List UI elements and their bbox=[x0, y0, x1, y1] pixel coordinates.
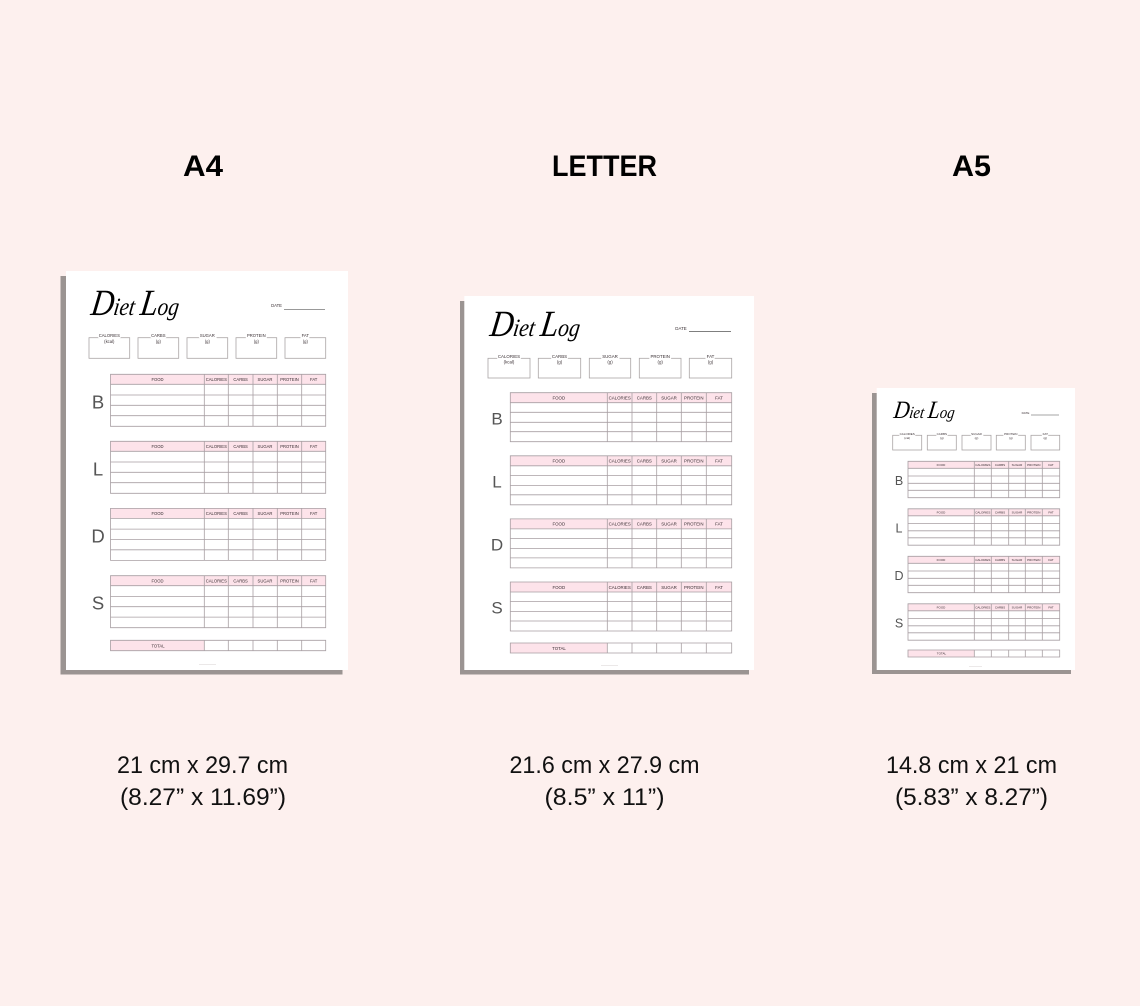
summary box: calories bbox=[488, 354, 530, 378]
date field: DATE bbox=[1022, 411, 1029, 415]
table: snacks: CALORIES bbox=[609, 585, 631, 590]
meal letter B: B bbox=[491, 410, 503, 428]
total row bbox=[110, 640, 326, 651]
table: lunch: FOOD bbox=[937, 510, 946, 514]
table: breakfast: SUGAR bbox=[258, 377, 272, 382]
table: breakfast bbox=[908, 461, 1060, 498]
summary box: calories: (cal) bbox=[904, 436, 910, 440]
dimensions: Letter bbox=[510, 752, 700, 811]
table: snacks: CARBS bbox=[637, 585, 652, 590]
title: Diet Log bbox=[88, 283, 182, 324]
table: dinner bbox=[110, 508, 326, 560]
summary box: carbs: (g) bbox=[940, 436, 944, 440]
table: dinner: PROTEIN bbox=[280, 511, 299, 516]
summary box: fat: FAT bbox=[1043, 432, 1048, 436]
table: snacks: FOOD bbox=[937, 605, 946, 609]
table: snacks: SUGAR bbox=[1012, 605, 1023, 609]
summary box: sugar: (g) bbox=[607, 360, 613, 364]
summary box: protein: (g) bbox=[1009, 436, 1013, 440]
table: snacks: PROTEIN bbox=[280, 579, 299, 584]
table: breakfast: CARBS bbox=[995, 463, 1005, 467]
summary box: carbs: (g) bbox=[156, 339, 161, 344]
heading: A4: A4 bbox=[183, 150, 223, 183]
table: dinner bbox=[510, 519, 732, 568]
table: lunch: SUGAR bbox=[258, 444, 272, 449]
dimensions: Letter: 21.6 cm x 27.9 cm bbox=[510, 752, 700, 779]
table: snacks bbox=[110, 576, 326, 628]
table: dinner: PROTEIN bbox=[684, 522, 704, 527]
page shadow bbox=[872, 393, 1071, 674]
table: snacks: CALORIES bbox=[206, 579, 227, 584]
date field: DATE bbox=[271, 303, 282, 308]
summary box: protein: PROTEIN bbox=[650, 354, 670, 359]
table: lunch: FAT bbox=[310, 444, 318, 449]
table: dinner: FAT bbox=[1048, 558, 1054, 562]
heading: A5: A5 bbox=[952, 150, 991, 183]
panel: A5 page bbox=[872, 388, 1075, 674]
table: breakfast: FOOD bbox=[552, 396, 565, 401]
table: dinner: PROTEIN bbox=[1027, 558, 1040, 562]
summary box: protein bbox=[996, 432, 1025, 450]
summary box: sugar: (g) bbox=[975, 436, 978, 440]
summary box: sugar: SUGAR bbox=[602, 354, 618, 359]
table: snacks: CARBS bbox=[233, 579, 248, 584]
page sheet bbox=[464, 296, 754, 670]
summary box: sugar bbox=[589, 354, 631, 378]
table: lunch: FOOD bbox=[552, 459, 565, 464]
table: breakfast bbox=[110, 374, 326, 426]
table: snacks: PROTEIN bbox=[1027, 605, 1040, 609]
summary box: carbs: (g) bbox=[557, 360, 563, 364]
meal letter S: S bbox=[491, 598, 503, 618]
summary box: sugar bbox=[187, 333, 228, 358]
table: breakfast: CARBS bbox=[233, 377, 248, 382]
table: dinner: SUGAR bbox=[661, 522, 677, 527]
table: breakfast: FOOD bbox=[937, 463, 946, 467]
page shadow bbox=[60, 276, 342, 674]
summary box: carbs: CARBS bbox=[937, 432, 947, 436]
page sheet bbox=[877, 388, 1075, 670]
title: Diet Log bbox=[487, 304, 583, 345]
summary box: protein: PROTEIN bbox=[247, 333, 266, 338]
dimensions: A5: (5.83” x 8.27”) bbox=[895, 784, 1048, 811]
table: lunch: CARBS bbox=[995, 510, 1005, 514]
table: lunch: CALORIES bbox=[975, 510, 990, 514]
table: snacks: CARBS bbox=[995, 605, 1005, 609]
dimensions: A5 bbox=[886, 752, 1057, 811]
summary box: protein bbox=[639, 354, 681, 378]
table: breakfast: FAT bbox=[1048, 463, 1054, 467]
summary box: sugar: SUGAR bbox=[971, 432, 983, 436]
table: dinner: FAT bbox=[715, 522, 723, 527]
table: breakfast: FAT bbox=[310, 377, 318, 382]
table: snacks bbox=[908, 604, 1060, 640]
meal letter L: L bbox=[492, 472, 502, 492]
summary box: protein: (g) bbox=[254, 339, 259, 344]
table: lunch: FAT bbox=[1048, 510, 1054, 514]
table: lunch: FAT bbox=[715, 459, 723, 464]
dimensions: A4: 21 cm x 29.7 cm bbox=[117, 752, 288, 779]
panel: A4 page bbox=[60, 271, 348, 674]
total row: TOTAL bbox=[937, 652, 947, 656]
meal letter D: D bbox=[894, 569, 904, 583]
summary box: protein bbox=[236, 333, 277, 358]
summary box: protein: PROTEIN bbox=[1004, 432, 1017, 436]
summary box: carbs bbox=[538, 354, 581, 378]
summary box: fat bbox=[285, 333, 326, 358]
table: breakfast: PROTEIN bbox=[1027, 463, 1040, 467]
summary box: fat bbox=[1031, 432, 1060, 450]
date field: DATE bbox=[675, 326, 687, 331]
table: snacks: FOOD bbox=[151, 579, 164, 584]
dimensions: Letter: (8.5” x 11”) bbox=[544, 784, 664, 811]
table: lunch: PROTEIN bbox=[684, 459, 704, 464]
table: lunch: PROTEIN bbox=[1027, 510, 1040, 514]
summary box: fat: (g) bbox=[303, 339, 308, 344]
summary box: sugar: (g) bbox=[205, 339, 210, 344]
table: lunch: PROTEIN bbox=[280, 444, 299, 449]
summary box: calories: CALORIES bbox=[498, 354, 520, 359]
dimensions: A5: 14.8 cm x 21 cm bbox=[886, 752, 1057, 779]
summary box: fat: (g) bbox=[708, 360, 714, 364]
summary box: calories bbox=[893, 432, 922, 450]
table: lunch: FOOD bbox=[151, 444, 164, 449]
meal letter B: B bbox=[92, 392, 104, 412]
table: dinner: CALORIES bbox=[609, 522, 631, 527]
meal letter D: D bbox=[91, 526, 105, 546]
title: Diet Log bbox=[891, 397, 957, 424]
table: dinner: FOOD bbox=[552, 522, 565, 527]
heading: LETTER: LETTER bbox=[552, 150, 657, 183]
table: dinner: FAT bbox=[310, 511, 318, 516]
date field bbox=[675, 326, 731, 332]
table: lunch: CALORIES bbox=[206, 444, 227, 449]
table: dinner: CALORIES bbox=[975, 558, 990, 562]
table: lunch: CALORIES bbox=[609, 459, 631, 464]
total row: TOTAL bbox=[151, 643, 165, 648]
summary box: calories: CALORIES bbox=[900, 432, 915, 436]
table: lunch: SUGAR bbox=[1012, 510, 1023, 514]
table: breakfast: CALORIES bbox=[206, 377, 227, 382]
date field bbox=[1022, 411, 1059, 415]
meal letter D: D bbox=[491, 536, 503, 554]
table: breakfast: CALORIES bbox=[975, 463, 990, 467]
table: breakfast: PROTEIN bbox=[684, 396, 704, 401]
summary box: calories: (kcal) bbox=[104, 339, 115, 344]
table: snacks: SUGAR bbox=[661, 585, 677, 590]
table: snacks: FAT bbox=[310, 579, 318, 584]
table: dinner: SUGAR bbox=[258, 511, 272, 516]
dimensions: A4 bbox=[117, 752, 288, 811]
dimensions: A4: (8.27” x 11.69”) bbox=[120, 784, 286, 811]
table: lunch: SUGAR bbox=[661, 459, 677, 464]
table: breakfast: PROTEIN bbox=[280, 377, 299, 382]
table: dinner bbox=[908, 556, 1060, 593]
table: breakfast: SUGAR bbox=[1012, 463, 1023, 467]
table: dinner: CARBS bbox=[637, 522, 652, 527]
summary box: calories bbox=[89, 333, 130, 358]
summary box: sugar: SUGAR bbox=[200, 333, 215, 338]
table: lunch bbox=[908, 509, 1060, 545]
summary box: fat: FAT bbox=[707, 354, 715, 359]
table: dinner: FOOD bbox=[937, 558, 946, 562]
summary box: calories: CALORIES bbox=[99, 333, 120, 338]
total row bbox=[908, 650, 1060, 657]
table: snacks: SUGAR bbox=[258, 579, 272, 584]
summary box: carbs bbox=[927, 432, 956, 450]
table: breakfast: FAT bbox=[715, 396, 723, 401]
table: snacks bbox=[510, 582, 732, 631]
table: snacks: FAT bbox=[715, 585, 723, 590]
meal letter S: S bbox=[895, 616, 903, 630]
table: dinner: CARBS bbox=[995, 558, 1005, 562]
meal letter L: L bbox=[93, 458, 103, 480]
total row bbox=[510, 643, 732, 653]
summary box: fat: (g) bbox=[1043, 436, 1047, 440]
table: lunch: CARBS bbox=[637, 459, 652, 464]
summary box: fat: FAT bbox=[302, 333, 309, 338]
meal letter S: S bbox=[92, 592, 104, 614]
summary box: carbs: CARBS bbox=[151, 333, 166, 338]
page shadow bbox=[460, 301, 749, 674]
table: lunch: CARBS bbox=[233, 444, 248, 449]
table: lunch bbox=[110, 441, 326, 493]
table: dinner: CARBS bbox=[233, 511, 248, 516]
date field bbox=[271, 303, 325, 310]
summary box: carbs: CARBS bbox=[552, 354, 567, 359]
summary box: carbs bbox=[138, 333, 179, 358]
summary box: sugar bbox=[962, 432, 991, 450]
panel: Letter page bbox=[460, 296, 754, 674]
total row: TOTAL bbox=[552, 646, 566, 651]
table: lunch bbox=[510, 456, 732, 505]
table: snacks: FAT bbox=[1048, 605, 1054, 609]
table: breakfast: CALORIES bbox=[609, 396, 631, 401]
meal letter B: B bbox=[895, 474, 903, 488]
table: snacks: CALORIES bbox=[975, 605, 990, 609]
page sheet bbox=[66, 271, 348, 670]
table: breakfast: FOOD bbox=[151, 377, 164, 382]
summary box: fat bbox=[689, 354, 732, 378]
summary box: protein: (g) bbox=[658, 360, 663, 364]
summary box: calories: (kcal) bbox=[504, 360, 515, 364]
table: breakfast: SUGAR bbox=[661, 396, 677, 401]
table: breakfast bbox=[510, 393, 732, 442]
table: snacks: FOOD bbox=[552, 585, 565, 590]
table: dinner: SUGAR bbox=[1012, 558, 1023, 562]
table: breakfast: CARBS bbox=[637, 396, 652, 401]
meal letter L: L bbox=[896, 522, 903, 536]
table: dinner: CALORIES bbox=[206, 511, 227, 516]
table: dinner: FOOD bbox=[151, 511, 164, 516]
table: snacks: PROTEIN bbox=[684, 585, 704, 590]
